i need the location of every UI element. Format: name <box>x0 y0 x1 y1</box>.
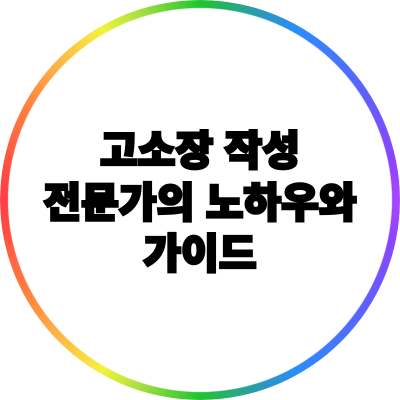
title <box>42 128 357 277</box>
title: 가이드 <box>143 231 257 277</box>
title: 전문가의 노하우와 <box>43 180 357 226</box>
title: 고소장 작성 <box>100 128 300 174</box>
